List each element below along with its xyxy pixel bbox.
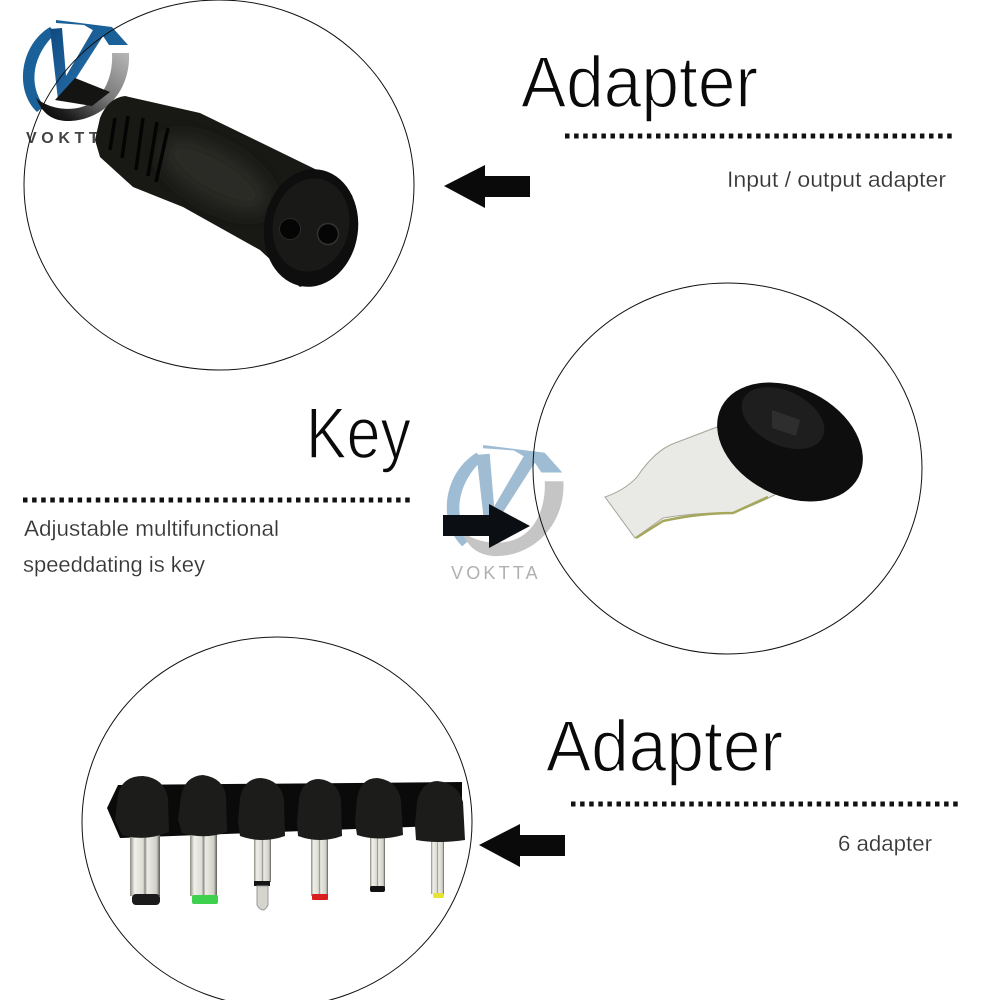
icon: VOKTTA watermark middle	[447, 445, 564, 583]
icon: tip 6	[415, 781, 465, 898]
heading: Adapter top: Adapter	[521, 43, 758, 123]
dotted divider middle	[23, 498, 411, 502]
icon: key blade	[605, 427, 790, 538]
panel: key circle	[533, 283, 922, 654]
icon: tips rail	[107, 782, 462, 838]
arrow: pointing right to key circle	[443, 504, 530, 548]
caption: 6 adapter: 6 adapter	[838, 831, 932, 856]
dotted divider bottom	[571, 802, 959, 806]
caption: adjustable key: speeddating is key	[23, 552, 205, 577]
caption: input output adapter: Input / output adapter	[727, 167, 946, 192]
logo wordmark: VOKTT	[26, 130, 103, 147]
arrow: pointing left to tips circle	[479, 824, 565, 867]
icon: VOKTTA logo top-left	[23, 20, 129, 147]
dotted divider top	[565, 134, 953, 138]
caption: adjustable key: Adjustable multifunctional	[24, 516, 279, 541]
caption: adjustable key	[23, 516, 279, 577]
icon: tip 5	[355, 778, 403, 892]
arrow: pointing left to top circle	[444, 165, 530, 208]
icon: tip 4	[297, 779, 342, 900]
icon: black barrel connector	[95, 96, 366, 293]
heading: Key: Key	[306, 394, 411, 474]
icon: tip 2	[178, 775, 227, 904]
heading: Adapter bottom: Adapter	[546, 707, 783, 787]
icon: tip 3	[238, 778, 285, 910]
icon: tip 1	[115, 776, 169, 905]
panel: input/output adapter circle	[24, 0, 414, 370]
watermark wordmark: VOKTTA	[451, 563, 541, 583]
panel: six tips circle	[82, 637, 472, 1000]
icon: key knob	[697, 359, 883, 525]
